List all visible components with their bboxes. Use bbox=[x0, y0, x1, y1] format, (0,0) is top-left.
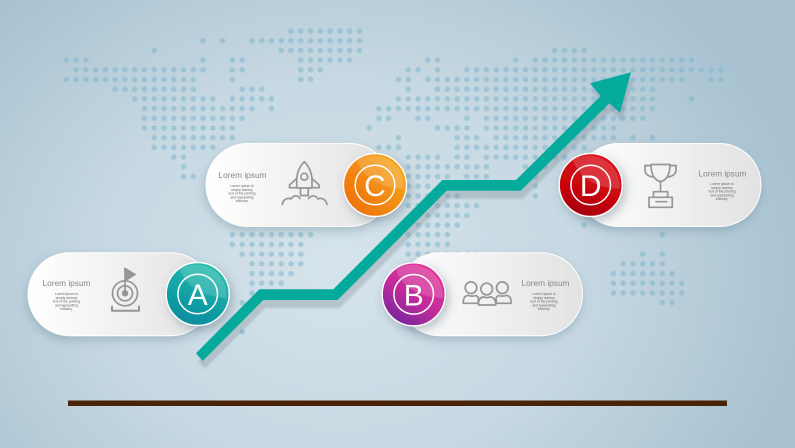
card C body bbox=[206, 144, 391, 226]
icon: rocket bbox=[282, 162, 327, 204]
icon: trophy bbox=[645, 164, 676, 207]
card A text: Lorem Ipsum is bbox=[55, 292, 78, 296]
card D text: Lorem Ipsum is bbox=[710, 182, 734, 186]
card C text: Lorem Ipsum is bbox=[230, 184, 254, 188]
card A heading: Lorem ipsum bbox=[43, 278, 91, 288]
baseline bar bbox=[68, 400, 727, 406]
badge C: C bbox=[364, 170, 386, 203]
card A text: and typesetting bbox=[55, 303, 78, 307]
arrow shadow bbox=[198, 80, 633, 369]
growth arrow bbox=[196, 72, 631, 361]
badge A bbox=[166, 262, 229, 326]
card D text: industry. bbox=[716, 197, 728, 201]
card B text: industry. bbox=[538, 307, 550, 311]
badge B: B bbox=[404, 279, 424, 312]
panel: card C bbox=[206, 144, 406, 226]
card C heading: Lorem ipsum bbox=[219, 170, 267, 180]
card C text: simply dummy bbox=[231, 188, 253, 192]
card C text: text of the printing bbox=[229, 192, 256, 196]
badge C bbox=[344, 154, 406, 216]
card A text: industry. bbox=[60, 307, 73, 311]
card D heading: Lorem ipsum bbox=[699, 168, 747, 178]
card A text: text of the printing bbox=[53, 300, 80, 304]
card A text: simply dummy bbox=[56, 296, 78, 300]
panel: card B bbox=[382, 253, 582, 336]
icon: people bbox=[463, 282, 511, 305]
dotted world map bbox=[66, 31, 721, 332]
badge B bbox=[382, 263, 445, 326]
card B text: and typesetting bbox=[532, 303, 556, 307]
panel: card D bbox=[559, 144, 761, 226]
card C text: industry. bbox=[236, 199, 248, 203]
card D text: and typesetting bbox=[710, 193, 734, 197]
card B text: text of the printing bbox=[531, 300, 558, 304]
card D body bbox=[577, 144, 761, 226]
icon: target with flag bbox=[112, 268, 139, 311]
badge D: D bbox=[580, 170, 602, 203]
card B text: Lorem Ipsum is bbox=[532, 292, 556, 296]
card D text: text of the printing bbox=[709, 190, 736, 194]
badge A: A bbox=[188, 279, 208, 312]
card A body bbox=[28, 253, 212, 336]
badge D bbox=[559, 154, 622, 216]
card B body bbox=[398, 253, 582, 336]
card C text: and typesetting bbox=[230, 195, 254, 199]
card B text: simply dummy bbox=[533, 296, 555, 300]
card B heading: Lorem ipsum bbox=[522, 278, 570, 288]
card D text: simply dummy bbox=[711, 186, 733, 190]
panel: card A bbox=[28, 253, 229, 336]
